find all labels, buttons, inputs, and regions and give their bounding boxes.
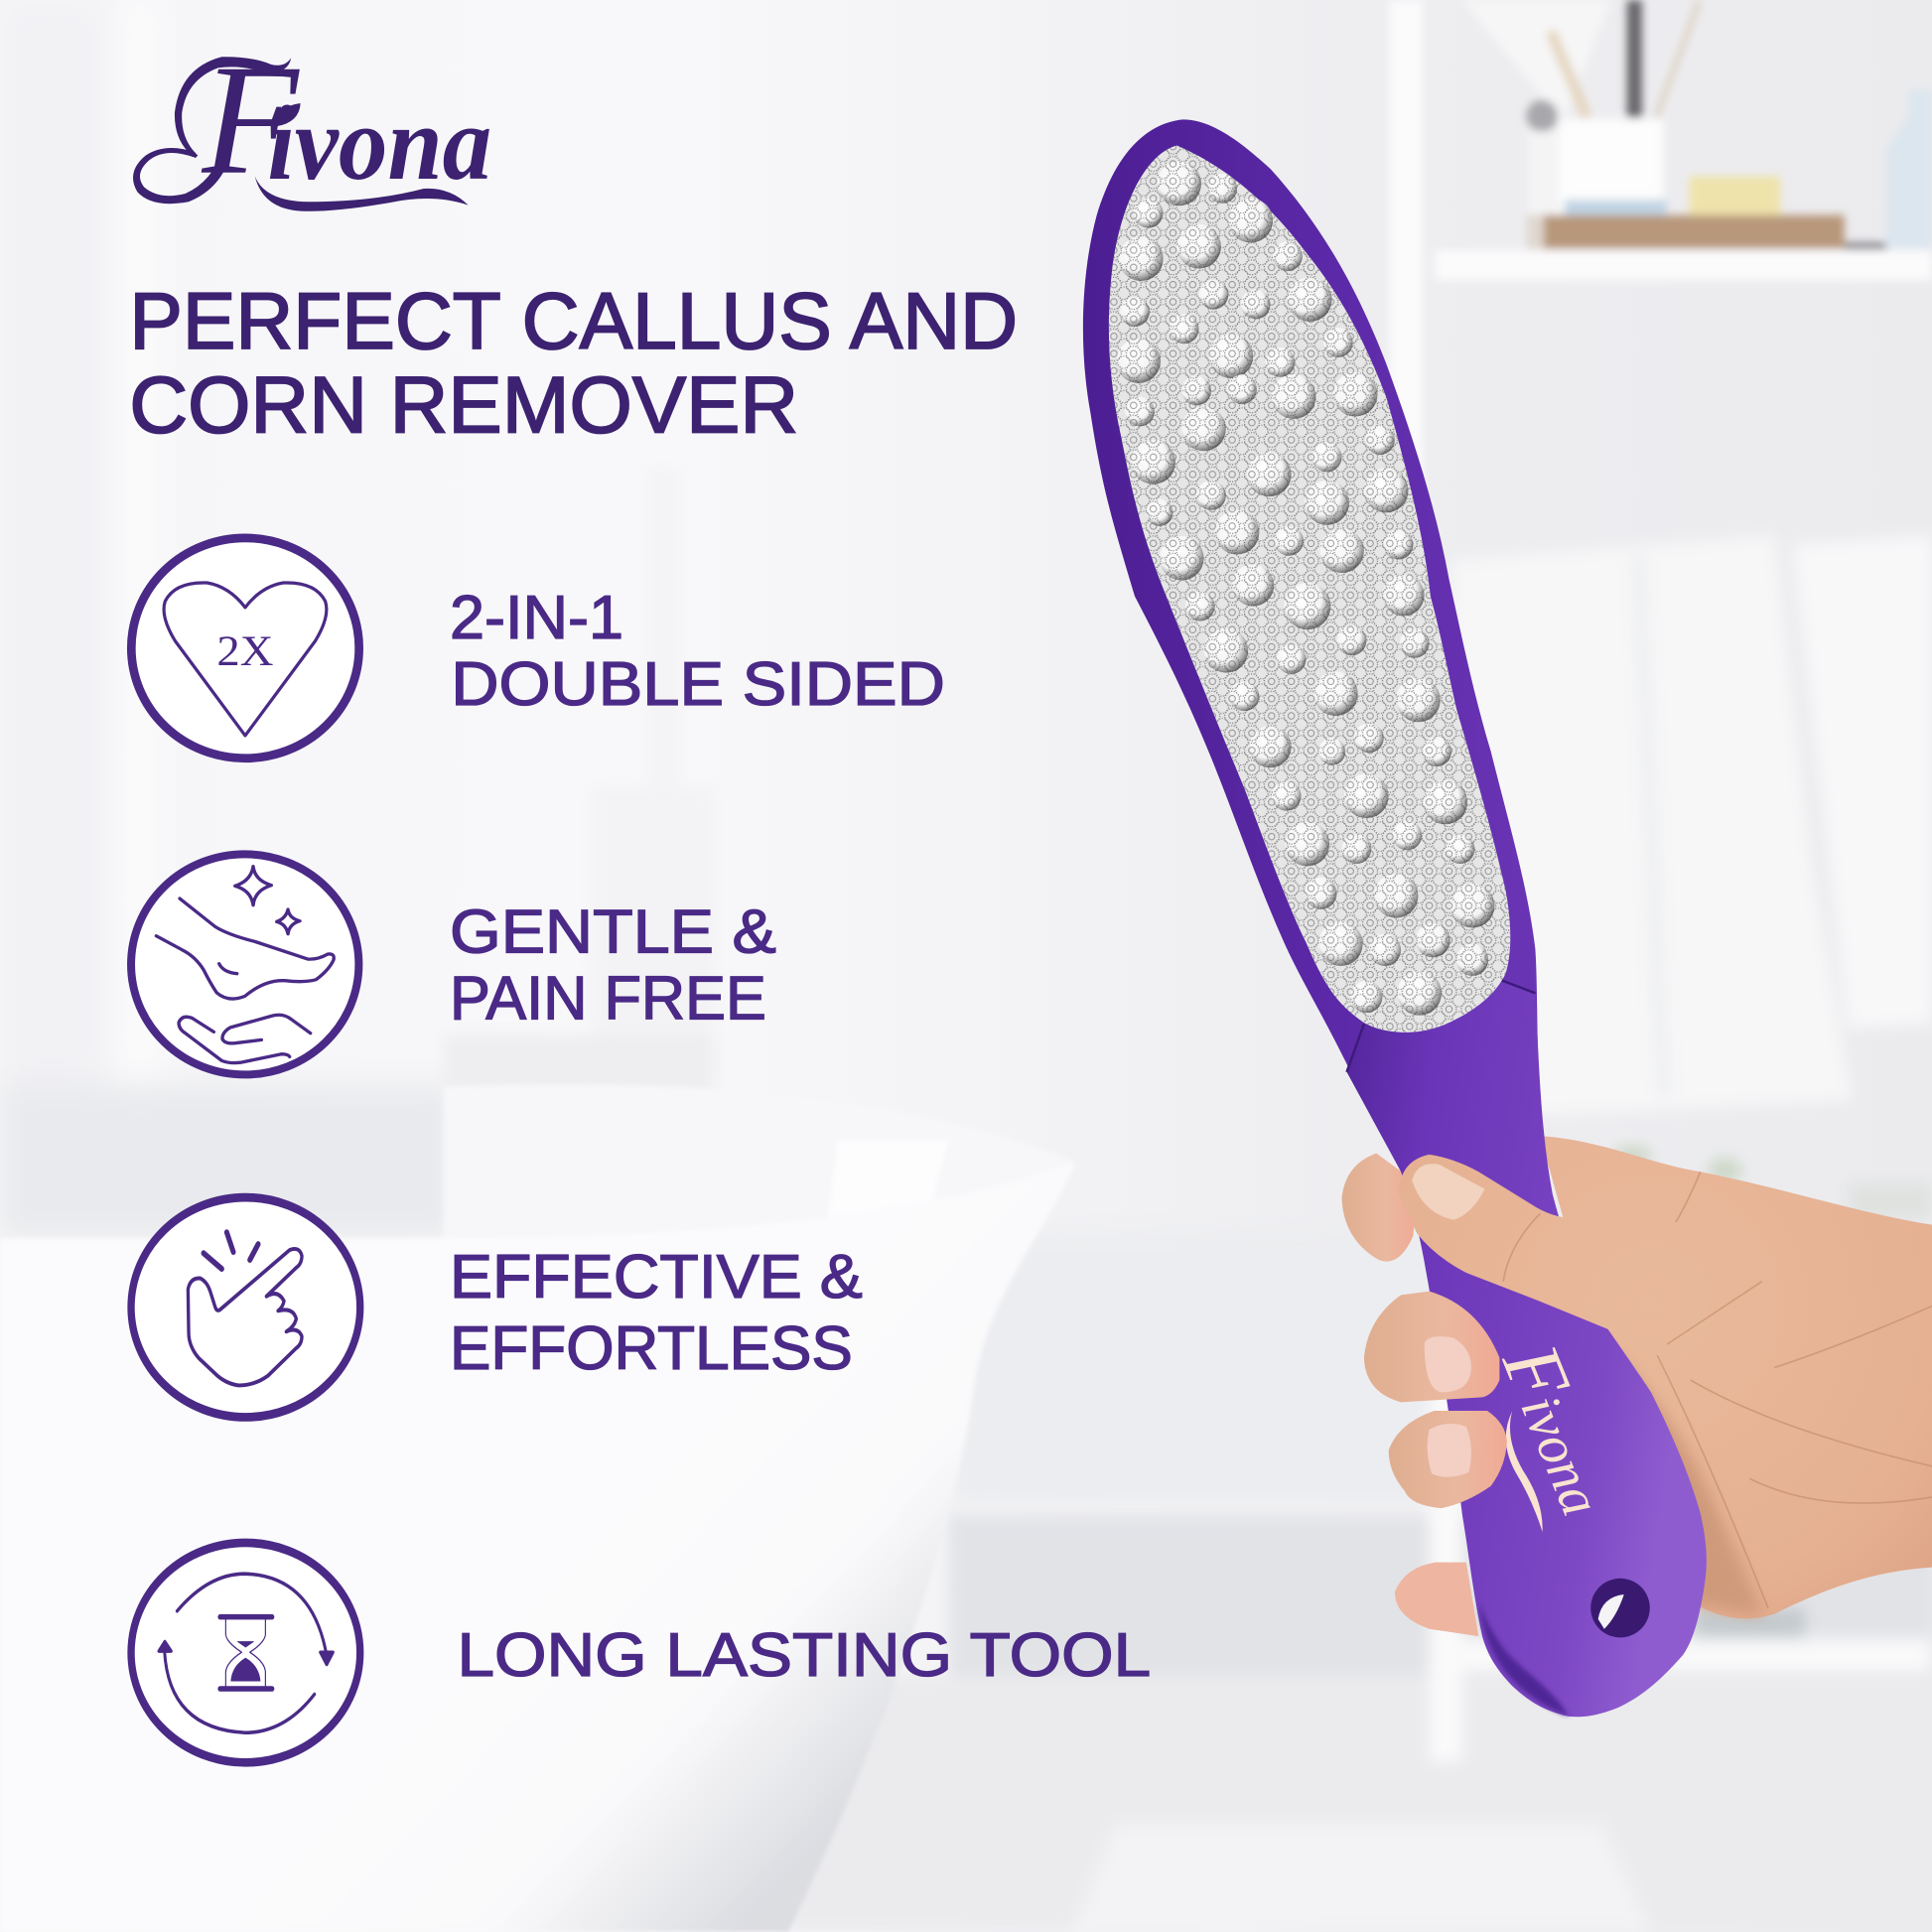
feature text: gentle: GENTLE & <box>450 897 776 966</box>
title <box>129 277 1018 451</box>
hand creases <box>1503 1172 1932 1608</box>
middle finger <box>1364 1292 1499 1402</box>
handle wordmark <box>1473 1331 1635 1533</box>
ring finger <box>1389 1411 1507 1508</box>
icon: heart 2X: 2X <box>216 627 274 675</box>
upper shelf with cup, soap and tray <box>1390 0 1932 1106</box>
feature text: double sided: 2-IN-1 <box>450 584 623 652</box>
icon: hourglass with arrows <box>131 1543 360 1762</box>
handle edge shadow <box>1478 1601 1569 1717</box>
feature text: double sided: DOUBLE SIDED <box>451 650 945 719</box>
tool body <box>1083 119 1539 1082</box>
middle fingernail <box>1425 1336 1471 1392</box>
icon: finger snap <box>131 1197 360 1417</box>
lower shelf <box>1430 1146 1932 1762</box>
handle wordmark: F <box>1485 1331 1588 1413</box>
ring fingernail <box>1428 1424 1471 1477</box>
thumb <box>1399 1155 1799 1344</box>
brand logo: Fivona: ivona <box>267 85 491 203</box>
palm shadow beside handle <box>1601 1343 1764 1616</box>
hand behind the tool <box>1342 1136 1932 1636</box>
bathtub <box>0 1085 1075 1932</box>
icon: heart 2X <box>131 538 359 759</box>
feature text: effective: EFFECTIVE & <box>450 1243 863 1311</box>
brand logo: Fivona <box>133 33 491 211</box>
dotted ring texture <box>1109 145 1510 1033</box>
brand logo: Fivona: F <box>202 33 301 207</box>
feature text: effective: EFFORTLESS <box>450 1314 853 1383</box>
feature text: gentle: PAIN FREE <box>450 964 766 1033</box>
seam lines <box>1346 980 1535 1072</box>
handle <box>1346 980 1707 1717</box>
metal grating plate <box>1109 145 1510 1033</box>
index fingertip behind handle <box>1342 1154 1417 1262</box>
feature text: double sided <box>450 584 945 719</box>
foot file tool <box>1083 119 1707 1717</box>
raised bumps <box>1116 162 1494 1016</box>
title: CORN REMOVER <box>129 361 798 451</box>
icon: foot and hand with sparkles <box>131 854 358 1074</box>
logo swashes and leaf <box>133 57 469 211</box>
feature text: effective <box>450 1243 863 1383</box>
towels <box>1451 536 1932 1115</box>
hand in front of the tool <box>1364 1155 1932 1608</box>
thumbnail <box>1412 1164 1484 1220</box>
hanging hole <box>1580 1568 1661 1648</box>
feature text: gentle <box>450 897 776 1033</box>
little finger behind handle <box>1395 1563 1478 1636</box>
feature text: long lasting: LONG LASTING TOOL <box>457 1621 1151 1690</box>
handle wordmark: ivona <box>1508 1387 1612 1524</box>
title: PERFECT CALLUS AND <box>129 277 1018 366</box>
